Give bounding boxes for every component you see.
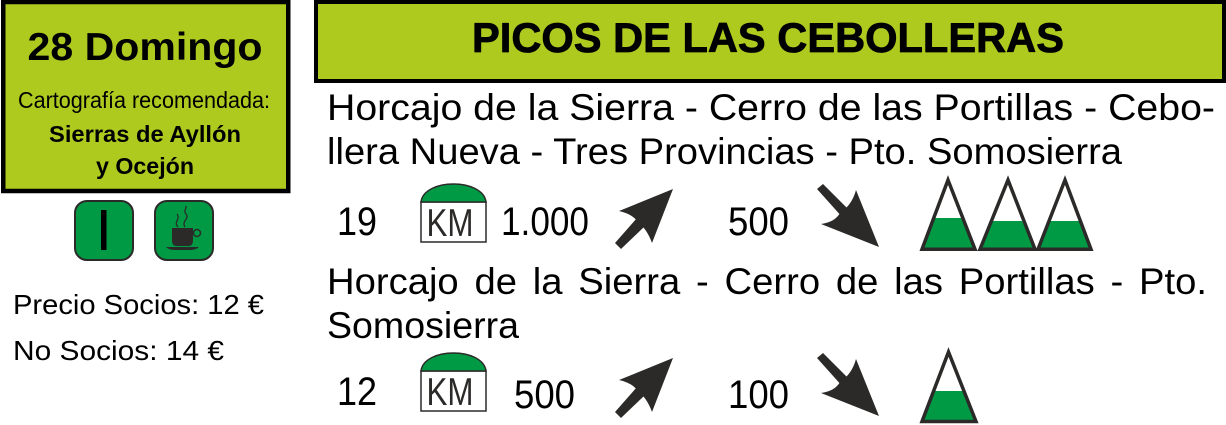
- text: short route distance: 12: [337, 370, 377, 414]
- text: map name second line: y Ocejón: [96, 153, 194, 179]
- icon: difficulty three peaks: [921, 180, 1092, 250]
- text: short route: [327, 261, 1207, 346]
- text: short route ascent: 500: [514, 373, 575, 417]
- icon: km marker: KM: [426, 371, 474, 414]
- text: short route: Somosierra: [327, 305, 519, 346]
- icon: descent arrow: [817, 353, 879, 416]
- text: map name: Sierras de Ayllón: [49, 121, 241, 147]
- icon: descent arrow: [817, 184, 879, 247]
- icon: km marker: KM: [426, 202, 474, 245]
- text: long route distance: 19: [337, 200, 377, 244]
- text: long route descent: 500: [728, 200, 789, 244]
- title banner: [316, 2, 1224, 81]
- icon: ascent arrow: [615, 189, 673, 249]
- text: long route: Horcajo de la Sierra - Cerro de las Portillas - Cebo-: [327, 87, 1215, 128]
- text: long route: llera Nueva - Tres Provincias - Pto. Somosierra: [327, 131, 1122, 172]
- text: non-member price: No Socios: 14 €: [13, 335, 224, 366]
- text: recommended cartography: Cartografía recomendada:: [18, 87, 270, 113]
- text: member price: Precio Socios: 12 €: [13, 289, 264, 320]
- text: long route ascent: 1.000: [501, 200, 589, 244]
- text: long route: [327, 87, 1215, 172]
- icon: km marker: [421, 353, 486, 414]
- text: short route: Horcajo de la Sierra - Cerro de las Portillas - Pto.: [327, 261, 1207, 302]
- icon: difficulty one peak: [921, 352, 977, 422]
- icon: km marker: [421, 184, 486, 245]
- icon: coffee cup badge: [155, 201, 213, 260]
- title banner: PICOS DE LAS CEBOLLERAS: [472, 14, 1064, 61]
- panel: date and cartography: [3, 2, 288, 191]
- icon: ascent arrow: [615, 358, 673, 418]
- text: short route descent: 100: [728, 373, 789, 417]
- icon: level I badge: [75, 201, 133, 260]
- heading: date: 28 Domingo: [28, 26, 262, 69]
